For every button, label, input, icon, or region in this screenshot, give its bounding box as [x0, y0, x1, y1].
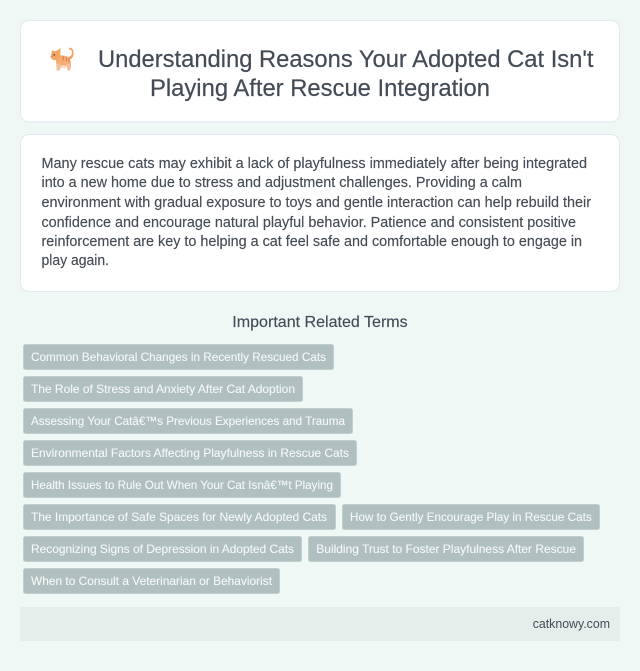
icon: cat: [51, 48, 74, 70]
paragraph: environment with gradual exposure to toys and gentle interaction can help rebuild their: [42, 195, 591, 211]
paragraph: [42, 156, 591, 269]
footer source text: catknowy.com: [533, 616, 610, 631]
tag 9: [308, 536, 584, 562]
paragraph: confidence and encourage natural playful behavior. Patience and consistent positive: [42, 215, 576, 231]
paragraph: Many rescue cats may exhibit a lack of playfulness immediately after being integrated: [42, 156, 587, 172]
tag 5: [24, 472, 340, 498]
tag 2: [24, 376, 302, 402]
panel: title card: [20, 20, 620, 122]
title line 1: Understanding Reasons Your Adopted Cat Isn't: [98, 46, 594, 73]
tag 7: [342, 504, 600, 530]
tag 1: Common Behavioral Changes in Recently Rescued Cats: [31, 350, 326, 364]
panel: related term tags: [24, 344, 600, 594]
paragraph: into a new home due to stress and adjustment challenges. Providing a calm: [42, 175, 522, 191]
tag 10: When to Consult a Veterinarian or Behaviorist: [31, 574, 273, 588]
paragraph: reinforcement are key to helping a cat feel safe and comfortable enough to engage in: [42, 234, 582, 250]
heading: related terms: Important Related Terms: [232, 314, 408, 331]
tag 10: [24, 568, 280, 594]
tag 7: How to Gently Encourage Play in Rescue Cats: [350, 510, 592, 524]
tag 3: [24, 408, 352, 434]
tag 9: Building Trust to Foster Playfulness After Rescue: [316, 542, 576, 556]
paragraph: play again.: [42, 253, 109, 269]
tag 4: Environmental Factors Affecting Playfulness in Rescue Cats: [31, 446, 349, 460]
tag 8: Recognizing Signs of Depression in Adopted Cats: [31, 542, 294, 556]
tag 5: Health Issues to Rule Out When Your Cat Isnâ€™t Playing: [31, 478, 333, 492]
tag 4: [24, 440, 356, 466]
tag 8: [24, 536, 302, 562]
title line 2: Playing After Rescue Integration: [150, 75, 490, 102]
tag 2: The Role of Stress and Anxiety After Cat Adoption: [31, 382, 295, 396]
tag 1: [24, 344, 334, 370]
tag 3: Assessing Your Catâ€™s Previous Experiences and Trauma: [31, 414, 345, 428]
tag 6: The Importance of Safe Spaces for Newly Adopted Cats: [31, 510, 327, 524]
tag 6: [24, 504, 336, 530]
panel: introduction text: [20, 134, 620, 292]
footer: [20, 607, 620, 641]
